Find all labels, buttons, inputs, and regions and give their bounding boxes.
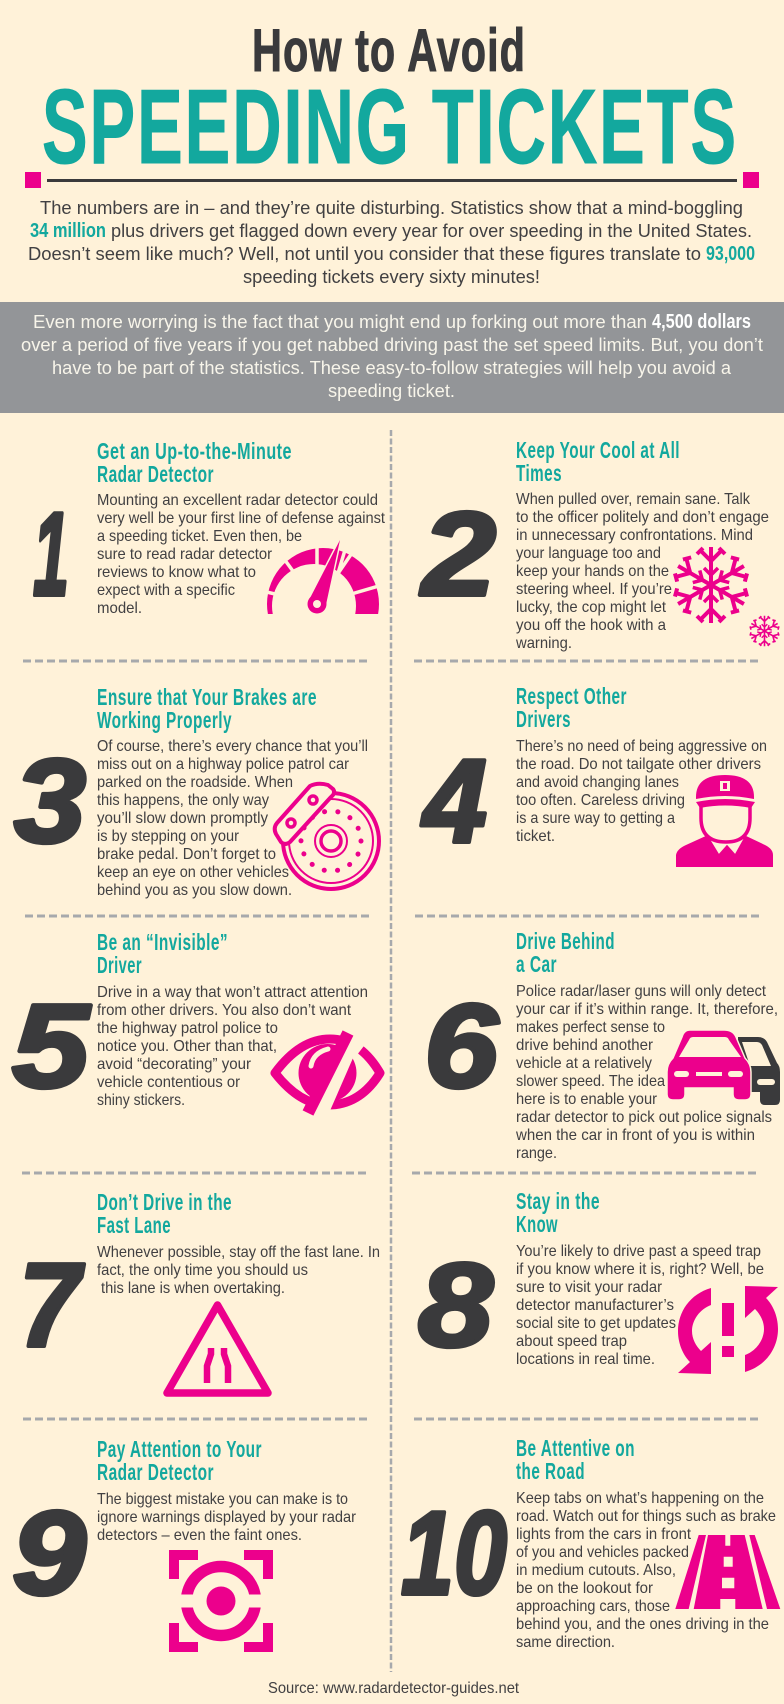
body text: detectors – even the faint ones.	[97, 1527, 302, 1544]
body text: a speeding ticket. Even then, be	[97, 528, 302, 545]
title	[42, 17, 738, 186]
body text: range.	[516, 1145, 557, 1162]
body text: when the car in front of you is within	[515, 1127, 755, 1144]
body text: notice you. Other than that,	[97, 1038, 277, 1055]
heading: Drivers	[516, 706, 571, 732]
intro paragraph: The numbers are in – and they’re quite disturbing. Statistics show that a mind-boggling	[40, 197, 743, 218]
panel: tip 5	[12, 929, 380, 1118]
icon: alert with circular arrows	[678, 1286, 778, 1374]
heading: the Road	[516, 1458, 585, 1484]
panel: tip 9	[12, 1436, 357, 1647]
title rule with pink end squares	[25, 172, 759, 188]
body text: your language too and	[516, 545, 661, 562]
body text: here is to enable your	[516, 1091, 658, 1108]
heading: Keep Your Cool at All	[516, 437, 680, 463]
body text: too often. Careless driving	[516, 792, 685, 809]
icon: road	[675, 1535, 780, 1609]
body text: you’ll slow down promptly	[97, 810, 268, 827]
heading	[97, 929, 228, 978]
number 7: 7	[19, 1239, 84, 1372]
heading: Be Attentive on	[516, 1435, 635, 1461]
body text: shiny stickers.	[97, 1092, 185, 1109]
body text	[515, 983, 778, 1162]
body text: is by stepping on your	[97, 828, 240, 845]
body text: Mounting an excellent radar detector could	[97, 492, 378, 509]
body text: sure to visit your radar	[516, 1279, 663, 1296]
heading: Don’t Drive in the	[97, 1189, 232, 1215]
body text: vehicle at a relatively	[516, 1055, 652, 1072]
body text: lucky, the cop might let	[516, 599, 667, 616]
icon: road narrows sign	[167, 1305, 268, 1393]
body text: from other drivers. You also don’t want	[97, 1002, 352, 1019]
number 2: 2	[420, 488, 496, 621]
panel: grey intro band: over a period of five years if you get nabbed driving past the set speed limits. But, you don’t	[21, 334, 763, 355]
panel: tip 3	[14, 684, 379, 899]
body text: is a sure way to getting a	[516, 810, 675, 827]
heading	[97, 1189, 232, 1238]
number 3: 3	[14, 735, 86, 868]
icon: police officer	[676, 775, 773, 867]
panel: tip 1	[32, 442, 385, 614]
icon: radar target	[174, 1555, 268, 1647]
body text: ticket.	[516, 828, 555, 845]
title line: How to Avoid: How to Avoid	[252, 17, 526, 84]
body text: Of course, there’s every chance that you’ll	[97, 738, 368, 755]
number 10: 10	[401, 1487, 507, 1620]
body text: very well be your first line of defense against	[97, 510, 386, 527]
body text	[515, 491, 769, 652]
icon: brake disc	[275, 784, 379, 889]
panel: grey intro band: 4,500 dollars	[652, 311, 751, 333]
body text: makes perfect sense to	[516, 1019, 665, 1036]
body text: When pulled over, remain sane. Talk	[516, 491, 751, 508]
body text: to the officer politely and don’t engage	[516, 509, 769, 526]
body text: vehicle contentious or	[97, 1074, 241, 1091]
intro paragraph: speeding tickets every sixty minutes!	[243, 266, 540, 287]
body text: of you and vehicles packed	[516, 1544, 689, 1561]
body text: about speed trap	[516, 1333, 627, 1350]
intro paragraph	[28, 197, 755, 287]
heading: Radar Detector	[97, 1459, 214, 1485]
body text: in unnecessary confrontations. Mind	[516, 527, 753, 544]
heading: Know	[516, 1211, 558, 1237]
body text: keep your hands on the	[516, 563, 669, 580]
body text: steering wheel. If you’re	[516, 581, 672, 598]
body text: model.	[97, 600, 142, 617]
heading	[516, 437, 680, 486]
body text: The biggest mistake you can make is to	[97, 1491, 348, 1508]
body text: warning.	[515, 635, 572, 652]
panel: grey intro band	[0, 302, 784, 413]
body text: lights from the cars in front	[516, 1526, 692, 1543]
body text: the road. Do not tailgate other drivers	[516, 756, 761, 773]
body text: you off the hook with a	[516, 617, 666, 634]
icon: crossed-out eye	[275, 1024, 380, 1118]
body text: You’re likely to drive past a speed trap	[516, 1243, 761, 1260]
intro paragraph: 93,000	[706, 243, 755, 265]
heading: Respect Other	[516, 683, 627, 709]
body text: Drive in a way that won’t attract attention	[97, 984, 368, 1001]
number 9: 9	[12, 1487, 86, 1620]
body text	[516, 1243, 764, 1368]
body text: Whenever possible, stay off the fast lane. In	[97, 1244, 380, 1261]
body text: in medium cutouts. Also,	[516, 1562, 676, 1579]
heading: Drive Behind	[516, 928, 615, 954]
panel: tip 10	[401, 1435, 780, 1651]
body text: expect with a specific	[97, 582, 235, 599]
body text	[97, 1491, 357, 1544]
body text	[97, 1244, 380, 1297]
panel: grey intro band: Even more worrying is the fact that you might end up forking out more than	[33, 311, 647, 332]
body text: parked on the roadside. When	[97, 774, 293, 791]
number 1: 1	[33, 488, 69, 621]
heading: Be an “Invisible”	[97, 929, 228, 955]
source credit: Source: www.radardetector-guides.net	[268, 1680, 520, 1697]
body text: the highway patrol police to	[97, 1020, 278, 1037]
panel: tip 8	[418, 1188, 778, 1374]
panel: tip 6	[424, 928, 780, 1162]
body text	[97, 984, 368, 1109]
icon: snowflakes	[671, 547, 780, 646]
body text: drive behind another	[516, 1037, 654, 1054]
body text: be on the lookout for	[516, 1580, 654, 1597]
heading	[97, 1436, 262, 1485]
heading: Pay Attention to Your	[97, 1436, 262, 1462]
heading: Working Properly	[97, 707, 232, 733]
body text: miss out on a highway police patrol car	[97, 756, 350, 773]
heading: Driver	[97, 952, 142, 978]
body text: behind you as you slow down.	[97, 882, 292, 899]
icon: speedometer	[267, 540, 379, 614]
body text: Police radar/laser guns will only detect	[516, 983, 767, 1000]
body text: social site to get updates	[516, 1315, 676, 1332]
panel: tip 4	[421, 683, 773, 868]
body text: sure to read radar detector	[97, 546, 273, 563]
body text: approaching cars, those	[516, 1598, 670, 1615]
number 4: 4	[421, 735, 487, 868]
heading: Get an Up-to-the-Minute	[97, 438, 292, 464]
body text: locations in real time.	[516, 1351, 655, 1368]
body text	[516, 738, 767, 845]
heading	[97, 438, 292, 487]
body text: this happens, the only way	[97, 792, 269, 809]
body text: avoid “decorating” your	[97, 1056, 252, 1073]
body text: slower speed. The idea	[516, 1073, 665, 1090]
body text: detector manufacturer’s	[516, 1297, 674, 1314]
heading	[516, 1435, 635, 1484]
body text	[516, 1490, 776, 1651]
heading: Ensure that Your Brakes are	[97, 684, 317, 710]
heading	[97, 684, 317, 733]
body text: and avoid changing lanes	[516, 774, 679, 791]
body text	[97, 492, 386, 617]
number 8: 8	[418, 1239, 494, 1372]
panel: tip 2	[420, 437, 780, 652]
body text: same direction.	[516, 1634, 615, 1651]
heading: Stay in the	[516, 1188, 600, 1214]
intro paragraph: Doesn’t seem like much? Well, not until you consider that these figures translate to	[28, 243, 701, 264]
body text: if you know where it is, right? Well, be	[516, 1261, 764, 1278]
number 6: 6	[424, 980, 499, 1113]
intro paragraph: 34 million	[30, 220, 106, 242]
body text: ignore warnings displayed by your radar	[97, 1509, 357, 1526]
heading	[516, 1188, 600, 1237]
body text: behind you, and the ones driving in the	[516, 1616, 769, 1633]
number 5: 5	[12, 980, 91, 1113]
intro paragraph: plus drivers get flagged down every year for over speeding in the United States.	[111, 220, 752, 241]
body text: Keep tabs on what’s happening on the	[516, 1490, 764, 1507]
panel: grey intro band: speeding ticket.	[328, 380, 455, 401]
body text: this lane is when overtaking.	[101, 1280, 285, 1297]
body text: fact, the only time you should us	[97, 1262, 308, 1279]
body text: keep an eye on other vehicles	[97, 864, 289, 881]
heading	[516, 928, 615, 977]
heading: Fast Lane	[97, 1212, 171, 1238]
body text: brake pedal. Don’t forget to	[97, 846, 276, 863]
icon: two cars	[667, 1030, 780, 1105]
panel: tip 7	[19, 1189, 380, 1393]
heading: Times	[516, 460, 562, 486]
heading	[516, 683, 627, 732]
heading: Radar Detector	[97, 461, 214, 487]
body text	[97, 738, 368, 899]
body text: reviews to know what to	[97, 564, 256, 581]
heading: a Car	[516, 951, 557, 977]
panel: grey intro band: have to be part of the statistics. These easy-to-follow strategies will help you avoid a	[52, 357, 732, 378]
